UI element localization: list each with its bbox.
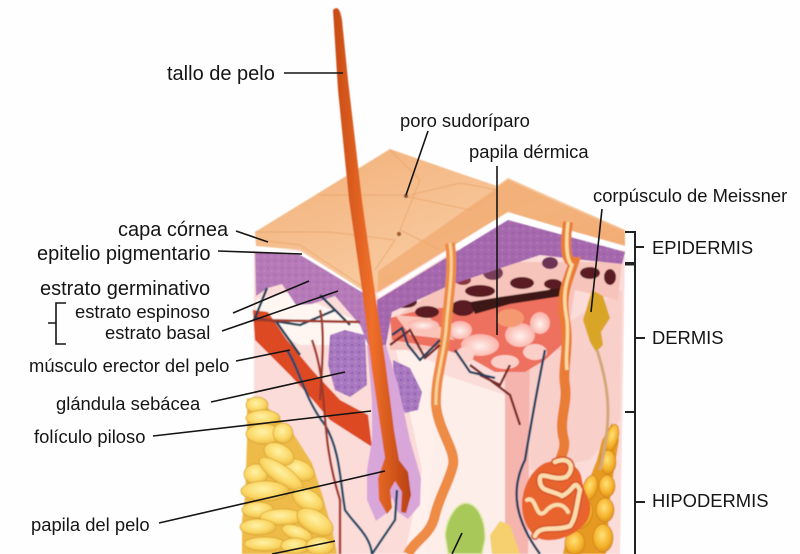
label: estrato germinativo: estrato germinativo [40, 278, 210, 300]
label: folículo piloso: folículo piloso [34, 426, 145, 447]
leader: estrato basal [222, 291, 338, 331]
dark dermal blotches [393, 257, 616, 318]
shadow on side wall [378, 180, 625, 292]
label: papila dérmica: papila dérmica [469, 141, 589, 162]
label: capa córnea: capa córnea [118, 219, 229, 241]
pale zone between purple and red [390, 262, 622, 350]
skin cross-section illustration [240, 8, 625, 554]
erector muscle [253, 310, 372, 447]
leader: papila dérmica [496, 166, 498, 335]
dermis and hypodermis background [254, 250, 625, 554]
leader: lower fat [272, 541, 335, 554]
hair shaft and bulb [333, 8, 411, 514]
label: estrato basal: estrato basal [105, 322, 210, 343]
leader: capa córnea [236, 231, 268, 242]
pale hair side [395, 345, 440, 554]
labels and leader lines [48, 73, 602, 554]
pink wash on right face [530, 290, 622, 470]
sweat duct right [557, 222, 574, 470]
sweat gland coil [522, 460, 590, 540]
hair follicle [367, 345, 421, 521]
white area under left papilla [255, 292, 368, 345]
white line left [255, 250, 368, 294]
label: músculo erector del pelo: músculo erector del pelo [29, 355, 229, 376]
label: poro sudoríparo: poro sudoríparo [400, 110, 530, 131]
pale dermis centre [420, 370, 505, 554]
label: glándula sebácea: glándula sebácea [56, 393, 201, 414]
green gland [445, 503, 485, 554]
Meissner corpuscle [583, 290, 610, 352]
label: estrato espinoso: estrato espinoso [75, 301, 210, 322]
right fat lobules [563, 423, 621, 554]
leader: estrato espinoso [233, 281, 309, 313]
label: EPIDERMIS: EPIDERMIS [652, 237, 753, 258]
bracket: layers [625, 232, 645, 554]
leader: poro sudoríparo [406, 131, 428, 195]
skin surface [255, 149, 625, 292]
blood vessels [253, 288, 545, 554]
pore dots [404, 194, 408, 198]
label: HIPODERMIS: HIPODERMIS [652, 490, 768, 511]
leader: green gland [452, 533, 462, 554]
white line right [378, 215, 625, 296]
darker pink fold [504, 355, 530, 554]
left fat lobules [240, 397, 338, 554]
sebaceous glands [328, 330, 422, 413]
bracket: estrato [48, 303, 66, 344]
purple epidermis right [377, 220, 625, 345]
nerve fibre [597, 350, 608, 470]
middle fat lobule [490, 521, 520, 554]
leader: corpúsculo de Meissner [591, 209, 602, 312]
red papillae zone [390, 285, 567, 372]
leader: glándula sebácea [211, 372, 345, 402]
sweat duct left [408, 243, 453, 554]
leader: músculo erector del pelo [236, 350, 290, 361]
leader: folículo piloso [153, 411, 371, 436]
label: epitelio pigmentario: epitelio pigmentario [37, 243, 210, 265]
leader: tallo de pelo [284, 72, 343, 74]
label: papila del pelo: papila del pelo [31, 514, 150, 535]
label: tallo de pelo: tallo de pelo [167, 63, 275, 85]
label: corpúsculo de Meissner: corpúsculo de Meissner [593, 185, 787, 206]
purple epidermis left [255, 252, 376, 350]
leader: papila del pelo [159, 471, 385, 523]
skin surface creases [255, 150, 500, 288]
label: DERMIS: DERMIS [652, 327, 724, 348]
leader: epitelio pigmentario [218, 251, 302, 254]
